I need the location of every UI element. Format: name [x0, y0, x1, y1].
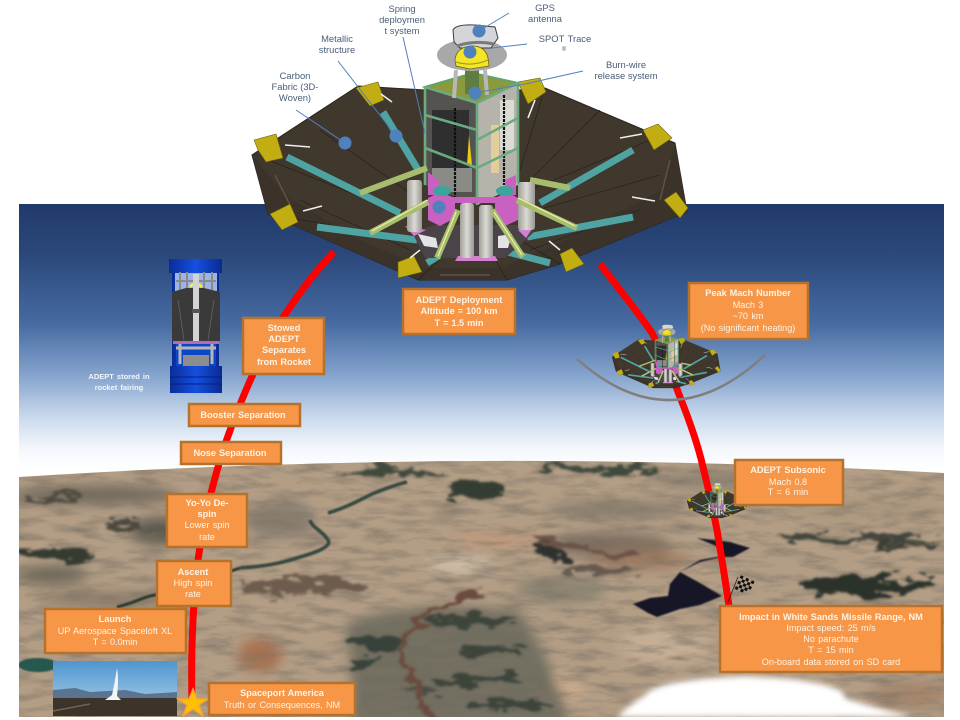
leader lines and blue callout dots [296, 13, 583, 214]
label: Carbon Fabric (3D-Woven): Fabric (3D- [272, 81, 318, 92]
bow shock arc [577, 355, 765, 400]
background: desert terrain [10, 440, 950, 720]
top payload: disk, yellow tracker, antenna [437, 25, 507, 98]
callout: Ascent: rate [185, 589, 201, 599]
callout: Yo-Yo De-spin: Lower spin [185, 520, 229, 530]
callout: Ascent: High spin [174, 578, 212, 588]
callout: ADEPT Subsonic: ADEPT Subsonic [750, 465, 826, 475]
caption: ADEPT stored in rocket fairing [88, 372, 150, 392]
callout: Booster Separation [189, 404, 300, 426]
label: Metallic structure: Metallic [321, 33, 353, 44]
callout: Yo-Yo De-spin [167, 494, 247, 547]
callout: Stowed ADEPT separates [243, 318, 324, 374]
icon: ADEPT subsonic [687, 483, 747, 518]
callout: Peak Mach Number: Peak Mach Number [705, 288, 791, 298]
callout: Impact in White Sands: No parachute [803, 634, 859, 644]
callout: Spaceport America: Spaceport America [240, 688, 325, 698]
label: Carbon Fabric (3D-Woven): Carbon [280, 70, 310, 81]
background: sky gradient [19, 204, 944, 494]
callout: ADEPT Deployment: Altitude = 100 km [420, 306, 498, 316]
label: Metallic structure: structure [319, 44, 355, 55]
callout: Stowed ADEPT separates: ADEPT [268, 334, 300, 344]
callout: Launch: UP Aerospace Spaceloft XL [58, 626, 172, 636]
callout: Impact in White Sands [720, 606, 942, 672]
callout: Peak Mach Number: Mach 3 [733, 300, 763, 310]
callout: Ascent [157, 561, 231, 606]
label: Carbon Fabric (3D-Woven): Woven) [279, 92, 311, 103]
caption: ADEPT stored in rocket fairing: ADEPT stored in [88, 372, 150, 381]
callout: Stowed ADEPT separates: from Rocket [257, 357, 311, 367]
callout: ADEPT Subsonic [735, 460, 843, 505]
label: Spring deployment system: Spring [388, 3, 416, 14]
trajectory: ascent and descent [192, 252, 729, 703]
callout: ADEPT Subsonic: T = 6 min [768, 487, 808, 497]
callout: Nose Separation: Nose Separation [194, 448, 267, 458]
callout: Stowed ADEPT separates: Separates [262, 345, 306, 355]
teal arms [287, 112, 633, 263]
callout: Launch: Launch [99, 614, 132, 624]
callout: Launch: T = 0.0min [93, 637, 137, 647]
label: Spring deployment system: t system [385, 25, 420, 36]
label: GPS antenna: GPS [535, 2, 555, 13]
callout: ADEPT Subsonic: Mach 0.8 [769, 477, 807, 487]
callout: ADEPT Deployment: ADEPT Deployment [416, 295, 502, 305]
caption: ADEPT stored in rocket fairing: rocket fairing [95, 383, 144, 392]
callout: Impact in White Sands: On-board data stored on SD card [762, 657, 900, 667]
launch photo [53, 661, 177, 716]
yellow latch brackets [254, 78, 688, 278]
callout: Stowed ADEPT separates: Stowed [268, 323, 300, 333]
callout: ADEPT Deployment: T = 1.5 min [435, 318, 484, 328]
callout: Peak Mach Number [689, 283, 808, 339]
label: GPS antenna: antenna [528, 13, 563, 24]
callout: Spaceport America [209, 683, 355, 715]
hub, spring cylinders and green struts [360, 168, 577, 261]
callout: Impact in White Sands: T = 15 min [808, 645, 854, 655]
panel: carbon fabric decelerator dish [252, 86, 687, 280]
callout: Yo-Yo De-spin: Yo-Yo De- [186, 498, 228, 508]
label: Burn-wire release system: release system [594, 70, 658, 81]
callout: Nose Separation [181, 442, 281, 464]
callout: Impact in White Sands: Impact in White Sands Missile Range, NM [739, 612, 923, 622]
callout: Yo-Yo De-spin: rate [199, 532, 215, 542]
callout: Spaceport America: Truth or Consequences, NM [224, 700, 340, 710]
dark streaks [19, 465, 945, 720]
river [240, 482, 407, 568]
icon: checkered finish flag [728, 575, 755, 602]
icon: deployed ADEPT vehicle [252, 25, 688, 280]
callout: Impact in White Sands: Impact speed: 25 m/s [786, 623, 876, 633]
callout: ADEPT Deployment [403, 289, 515, 334]
callout: Peak Mach Number: ~70 km [733, 311, 763, 321]
callout: Ascent: Ascent [178, 567, 208, 577]
callout: Yo-Yo De-spin: spin [198, 509, 217, 519]
callout: Booster Separation: Booster Separation [200, 410, 286, 420]
icon: launch site star [178, 689, 208, 716]
label: Burn-wire release system: Burn-wire [606, 59, 646, 70]
label: SPOT Trace: SPOT Trace [539, 33, 591, 44]
central column frame [425, 73, 518, 205]
label: Spring deployment system: deploymen [379, 14, 425, 25]
icon: ADEPT at peak Mach [612, 324, 721, 388]
label: SPOT Trace: ® [562, 46, 567, 53]
callout: Peak Mach Number: (No significant heating) [701, 323, 795, 333]
callout: Launch [45, 609, 186, 653]
icon: stowed ADEPT in rocket fairing [169, 259, 222, 393]
